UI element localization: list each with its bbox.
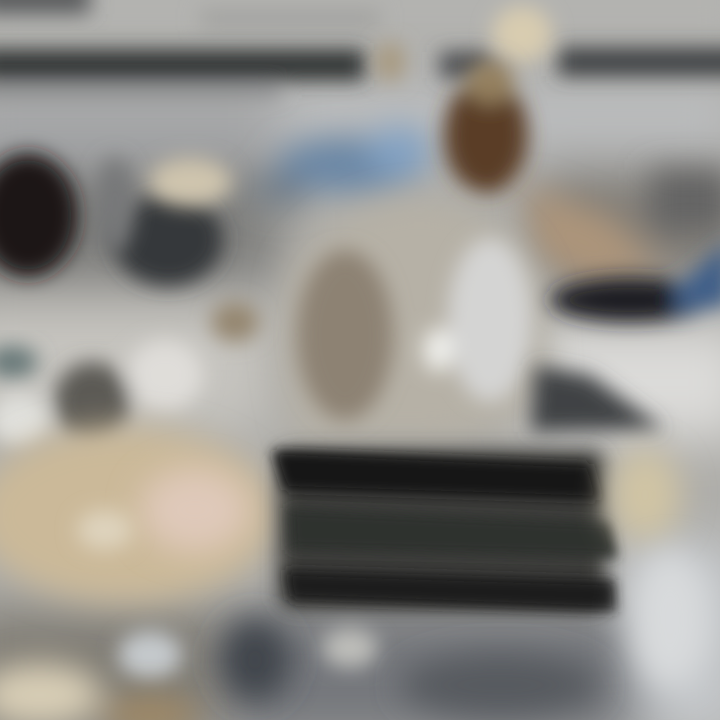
striped black stack — [272, 450, 618, 612]
bottom-left cream patch — [0, 663, 200, 720]
white figure body — [283, 198, 548, 440]
brown figure head — [444, 60, 528, 193]
cream hat — [492, 6, 552, 62]
bottom blue-grey foreground — [118, 550, 712, 717]
dark wedge behind stack — [530, 365, 665, 432]
tan round plate — [0, 427, 275, 603]
small grey figurine — [0, 302, 259, 446]
small cream highlight on band — [375, 42, 405, 82]
dark pot at left — [0, 153, 78, 277]
blue fabric — [252, 126, 432, 206]
figure body shading — [297, 238, 532, 420]
tan cloth at right — [609, 449, 681, 541]
grey pot with cream top — [95, 157, 232, 286]
tan arm at right — [525, 170, 720, 285]
teal accent on left — [0, 346, 38, 378]
dark dish at right — [550, 240, 720, 322]
dark horizontal band — [0, 48, 720, 96]
